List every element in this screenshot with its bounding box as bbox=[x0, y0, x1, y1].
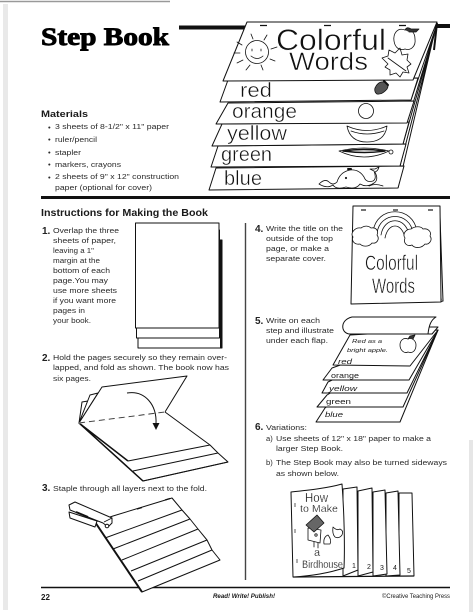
materials items: • bbox=[48, 173, 51, 182]
figure 2: folded pages bbox=[79, 376, 228, 481]
title: Step Book bbox=[41, 24, 169, 51]
step 5 text: under each flap. bbox=[266, 336, 328, 345]
step 6 text: b) bbox=[266, 458, 273, 467]
bottom rule bbox=[41, 586, 450, 588]
icon: orange fruit bbox=[358, 104, 374, 118]
step 6 text: larger Step Book. bbox=[276, 444, 343, 453]
step 6 text: Variations: bbox=[266, 423, 307, 432]
step: red: red bbox=[240, 80, 272, 102]
cover title: Colorful bbox=[276, 24, 386, 57]
icon: birdhouse bbox=[306, 515, 343, 548]
step 3 text: Staple through all layers next to the fold. bbox=[53, 484, 207, 493]
step 5 text: step and illustrate bbox=[266, 326, 334, 335]
flap: yellow: yellow bbox=[328, 384, 358, 393]
flap: orange: orange bbox=[331, 371, 359, 380]
figure 1: overlapped sheets bbox=[136, 223, 222, 348]
step 1 text: use more sheets bbox=[53, 286, 117, 295]
flap: green: green bbox=[326, 397, 351, 406]
figure 4: book cover bbox=[351, 206, 443, 304]
step 4 text: Write the title on the bbox=[266, 224, 343, 233]
page numbers: 3 bbox=[380, 565, 384, 572]
icon: clouds bbox=[352, 226, 431, 248]
step 1 text: if you want more bbox=[53, 296, 116, 305]
step 6 text bbox=[255, 422, 447, 478]
materials items: ruler/pencil bbox=[55, 135, 97, 144]
icon: banana bbox=[347, 126, 387, 142]
step 6 text: 6. bbox=[255, 422, 264, 433]
step 2 text: Hold the pages securely so they remain over- bbox=[53, 353, 228, 362]
cover: How to Make a Birdhouse: Birdhouse bbox=[302, 559, 343, 571]
step: orange bbox=[216, 101, 414, 124]
staples bbox=[361, 209, 433, 211]
step: blue: blue bbox=[224, 168, 262, 190]
book title: Read! Write! Publish! bbox=[213, 594, 275, 600]
step 4 text bbox=[255, 224, 343, 263]
flap: red page: Red as a bbox=[352, 339, 382, 345]
step 1 text: leaving a 1" bbox=[53, 246, 94, 255]
step 4 text: page, or make a bbox=[266, 244, 330, 253]
step 4 text: 4. bbox=[255, 224, 264, 235]
icon: stapler bbox=[69, 502, 112, 528]
materials items: • bbox=[48, 148, 51, 157]
step: red bbox=[220, 78, 418, 102]
icon: sun bbox=[234, 34, 277, 70]
step 1 text: margin at the bbox=[53, 256, 100, 265]
flap: red page bbox=[333, 330, 438, 366]
icon: apple bbox=[394, 28, 419, 50]
step 3 text bbox=[42, 483, 207, 494]
icon: strawberry bbox=[375, 81, 388, 94]
icon: leaf bbox=[382, 48, 411, 77]
step 6 text: The Step Book may also be turned sideways bbox=[276, 458, 447, 467]
staples bbox=[260, 24, 406, 26]
footer bbox=[41, 593, 450, 602]
materials items: markers, crayons bbox=[55, 160, 121, 169]
step 6 text: a) bbox=[266, 434, 273, 443]
step 1 text: bottom of each bbox=[53, 266, 110, 275]
flap: red page: bright apple. bbox=[347, 348, 388, 354]
step 1 text: pages in bbox=[53, 306, 85, 315]
materials items: • bbox=[48, 135, 51, 144]
page numbers: 1 bbox=[352, 563, 356, 570]
materials items: • bbox=[48, 123, 51, 132]
step 6 text: as shown below. bbox=[276, 469, 339, 478]
step 4 text: outside of the top bbox=[266, 234, 333, 243]
materials list bbox=[41, 109, 179, 192]
materials items bbox=[48, 122, 179, 192]
figure 3: stapling bbox=[69, 498, 220, 592]
cover: How to Make a Birdhouse: to Make bbox=[300, 503, 338, 515]
materials items: 2 sheets of 9" x 12" construction bbox=[55, 172, 179, 181]
figure 5: open step book bbox=[316, 317, 438, 422]
step 5 text bbox=[255, 316, 334, 345]
step 2 text bbox=[42, 353, 229, 383]
column divider bbox=[244, 223, 246, 580]
materials items: 3 sheets of 8-1/2" x 11" paper bbox=[55, 122, 170, 131]
step: yellow bbox=[212, 122, 409, 146]
step 1 text: 1. bbox=[42, 226, 51, 237]
step 5 text: 5. bbox=[255, 316, 264, 327]
materials items: paper (optional for cover) bbox=[55, 183, 153, 192]
arrow: fold direction bbox=[127, 393, 160, 430]
step: blue bbox=[209, 166, 404, 190]
step: yellow: yellow bbox=[227, 123, 288, 145]
cover title: Colorful bbox=[365, 252, 418, 275]
fold corner bbox=[428, 327, 438, 334]
step: green bbox=[211, 144, 406, 167]
page number: 22 bbox=[41, 593, 50, 602]
flap: blue: blue bbox=[325, 410, 343, 419]
step 1 text: sheets of paper, bbox=[53, 236, 116, 245]
publisher: ©Creative Teaching Press bbox=[382, 593, 450, 600]
cover page: Words bbox=[289, 48, 368, 76]
cover: How to Make a Birdhouse bbox=[291, 484, 344, 577]
step 6 text: Use sheets of 12" x 18" paper to make a bbox=[276, 434, 432, 443]
step: green: green bbox=[221, 144, 272, 166]
materials heading: Materials bbox=[41, 109, 88, 120]
cover: How to Make a Birdhouse: a bbox=[314, 547, 321, 559]
step 4 text: separate cover. bbox=[266, 254, 326, 263]
icon: whale bbox=[319, 167, 383, 188]
icon: peas bbox=[339, 148, 393, 157]
step 2 text: 2. bbox=[42, 353, 51, 364]
top divider bbox=[41, 196, 450, 199]
materials items: • bbox=[48, 160, 51, 169]
rolled flap bbox=[343, 317, 436, 334]
step: orange: orange bbox=[232, 101, 297, 123]
illustration: Colorful Words step book bbox=[209, 22, 437, 190]
step 1 text: your book. bbox=[53, 316, 91, 325]
page numbers: 4 bbox=[393, 565, 397, 572]
icon: apple bbox=[400, 335, 416, 353]
cover page bbox=[223, 22, 437, 81]
figure 6: sideways step book bbox=[291, 484, 414, 577]
figure 4: book cover: Words bbox=[372, 275, 415, 298]
flap: red page: red bbox=[338, 357, 353, 366]
page numbers: 2 bbox=[367, 564, 371, 571]
step 5 text: Write on each bbox=[266, 316, 320, 325]
materials items: stapler bbox=[55, 148, 82, 157]
page numbers bbox=[352, 563, 411, 575]
step 1 text bbox=[42, 226, 119, 325]
step 3 text: 3. bbox=[42, 483, 51, 494]
step 2 text: lapped, and fold as shown. The book now has bbox=[53, 363, 229, 372]
instructions heading: Instructions for Making the Book bbox=[41, 207, 208, 219]
step 1 text: page.You may bbox=[53, 276, 108, 285]
step 2 text: six pages. bbox=[53, 374, 91, 383]
page numbers: 5 bbox=[407, 568, 411, 575]
icon: rainbow bbox=[373, 212, 417, 238]
cover: How to Make a Birdhouse: How bbox=[305, 490, 329, 505]
step 1 text: Overlap the three bbox=[53, 226, 119, 235]
